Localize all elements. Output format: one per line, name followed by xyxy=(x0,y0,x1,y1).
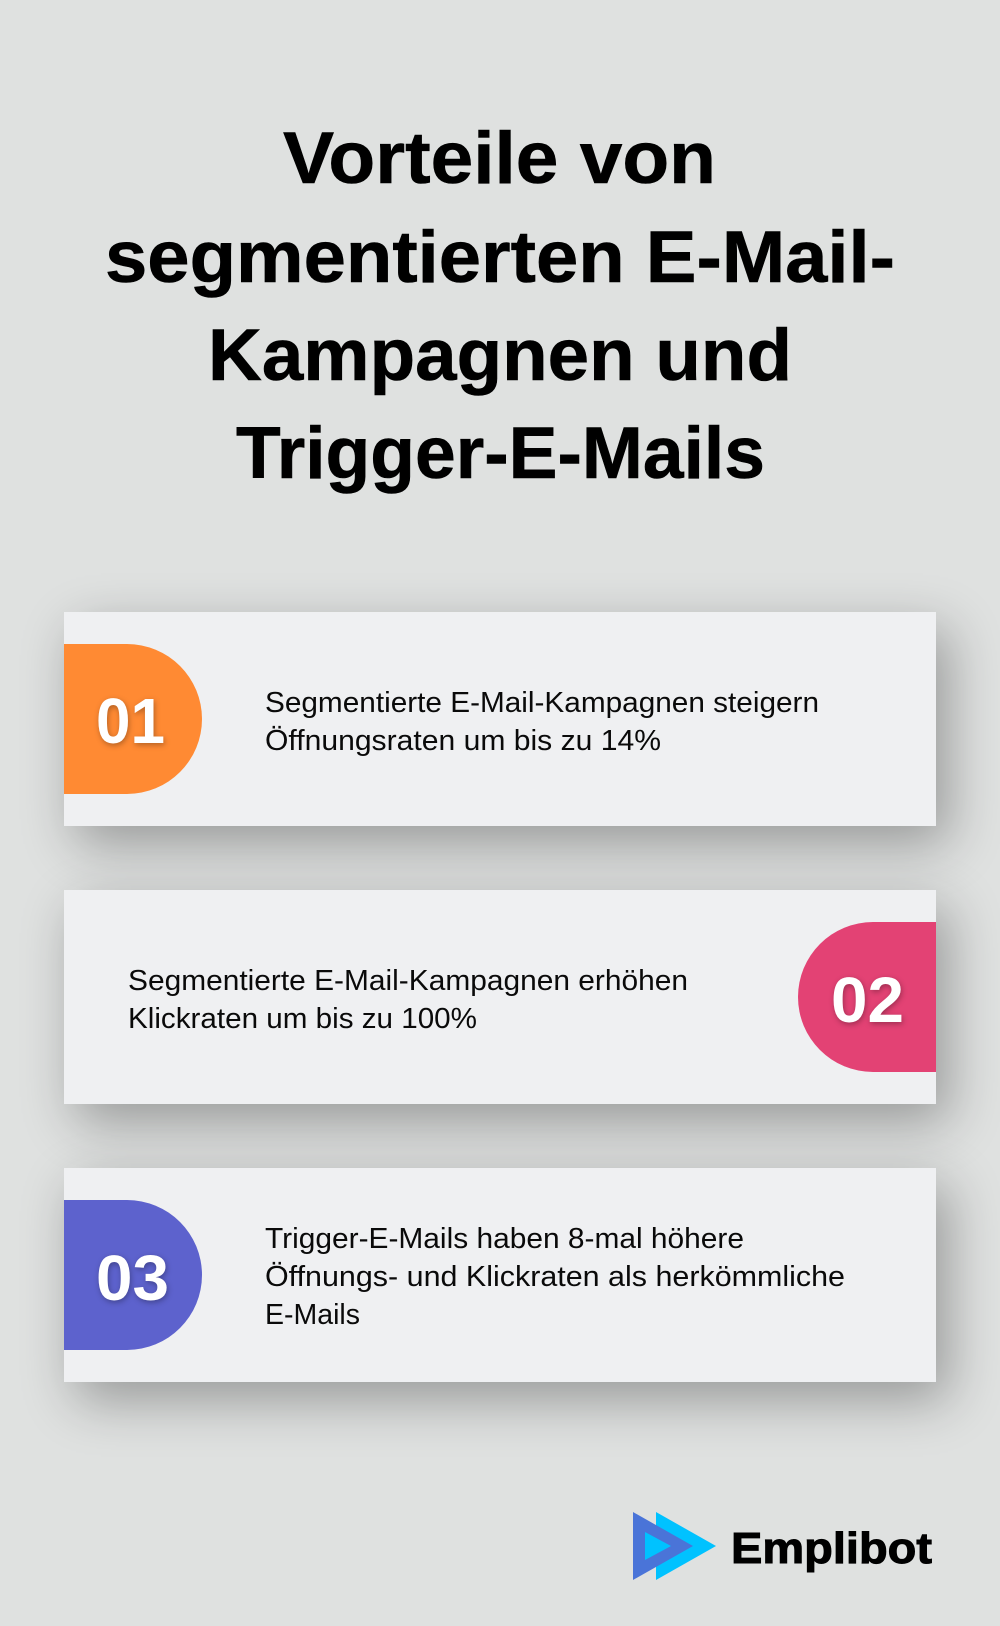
text: card 3 xyxy=(265,1223,845,1331)
text: card 2 xyxy=(128,965,688,1035)
title: Kampagnen und xyxy=(208,315,792,396)
title: Trigger-E-Mails xyxy=(236,413,765,494)
text: card 2: Segmentierte E-Mail-Kampagnen erhöhen xyxy=(128,965,688,997)
number 02: 02 xyxy=(831,964,904,1036)
panel: card 2 background xyxy=(64,890,936,1104)
title: Vorteile von xyxy=(283,118,716,199)
text: card 3: Öffnungs- und Klickraten als herkömmliche xyxy=(265,1261,845,1293)
logo: Emplibot: Emplibot xyxy=(731,1524,932,1573)
title xyxy=(105,118,895,494)
title: segmentierten E-Mail- xyxy=(105,217,895,298)
text: card 1 xyxy=(265,687,819,757)
text: card 3: E-Mails xyxy=(265,1299,360,1331)
text: card 2: Klickraten um bis zu 100% xyxy=(128,1003,477,1035)
text: card 1: Segmentierte E-Mail-Kampagnen steigern xyxy=(265,687,819,719)
logo: Emplibot xyxy=(633,1512,932,1580)
text: card 1: Öffnungsraten um bis zu 14% xyxy=(265,725,661,757)
number 01: 01 xyxy=(96,685,165,757)
number 03: 03 xyxy=(96,1242,169,1314)
text: card 3: Trigger-E-Mails haben 8-mal höhere xyxy=(265,1223,744,1255)
panel: card 3 background xyxy=(64,1168,936,1382)
panel: card 1 background xyxy=(64,612,936,826)
